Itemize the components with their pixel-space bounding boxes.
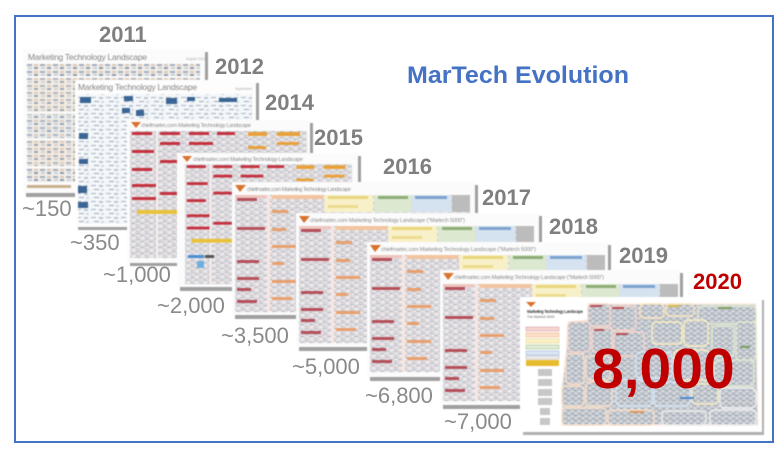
- legend thumbnails: [538, 369, 552, 425]
- label: 2017: 2017: [482, 185, 531, 210]
- label: 2016: 2016: [383, 154, 432, 179]
- panel: 2015: [177, 153, 361, 291]
- label: ~350: ~350: [70, 230, 120, 255]
- label: 2014: 2014: [265, 90, 315, 115]
- panel: 2018: chiefmartec.com Marketing Technology Landscape ("Martech 5000"): [381, 247, 536, 253]
- legend heading: [527, 309, 584, 319]
- label: ~1,000: ~1,000: [103, 262, 171, 287]
- icon: chiefmartec logo: [526, 302, 536, 307]
- panel: 2012: September: [235, 87, 253, 91]
- panel: 2016: chiefmartec.com Marketing Technology Landscape: [247, 187, 351, 193]
- panel: 2019: chiefmartec.com Marketing Technology Landscape ("Martech 5000"): [454, 275, 604, 281]
- callout: 8,000: 8,000: [592, 337, 735, 401]
- panel: 2017: [296, 213, 542, 351]
- label: 2019: 2019: [619, 243, 668, 268]
- panel: 2018: [367, 242, 611, 381]
- label: ~150: ~150: [22, 196, 72, 221]
- label: 2011: 2011: [99, 22, 147, 47]
- panel: 2014: chiefmartec.com Marketing Technology Landscape: [141, 123, 251, 129]
- panel: 2011: Marketing Technology Landscape: [28, 52, 147, 62]
- legend rows: [526, 327, 559, 366]
- label: ~6,800: ~6,800: [365, 383, 433, 408]
- panel: 2019: [440, 270, 683, 409]
- label: 2015: 2015: [314, 125, 363, 150]
- panel: 2016: [232, 182, 478, 319]
- panel: 2012: [75, 80, 259, 230]
- label: ~5,000: ~5,000: [292, 354, 360, 379]
- panel: 2011: [23, 49, 208, 197]
- map category tags: [590, 305, 750, 413]
- panel: 2015: chiefmartec.com Marketing Technology Landscape: [193, 157, 303, 163]
- label: 2020: 2020: [693, 269, 742, 294]
- panel: 2014: [127, 120, 313, 266]
- landscape map: [562, 304, 758, 425]
- label: ~3,500: ~3,500: [221, 323, 289, 348]
- legend heading: Marketing Technology Landscape: [527, 309, 584, 314]
- title: MarTech Evolution: [407, 62, 629, 89]
- panel: 2017: chiefmartec.com Marketing Technology Landscape ("Martech 5000"): [310, 218, 465, 224]
- label: 2012: 2012: [215, 54, 264, 79]
- panel: 2020: [520, 297, 764, 435]
- label: ~2,000: ~2,000: [157, 293, 225, 318]
- panel: 2012: Marketing Technology Landscape: [78, 82, 197, 92]
- label: 2018: 2018: [549, 214, 598, 239]
- label: ~7,000: ~7,000: [444, 409, 512, 434]
- panel: 2011: August 2011: [186, 57, 205, 61]
- legend heading: The Martech 5000: [527, 315, 555, 319]
